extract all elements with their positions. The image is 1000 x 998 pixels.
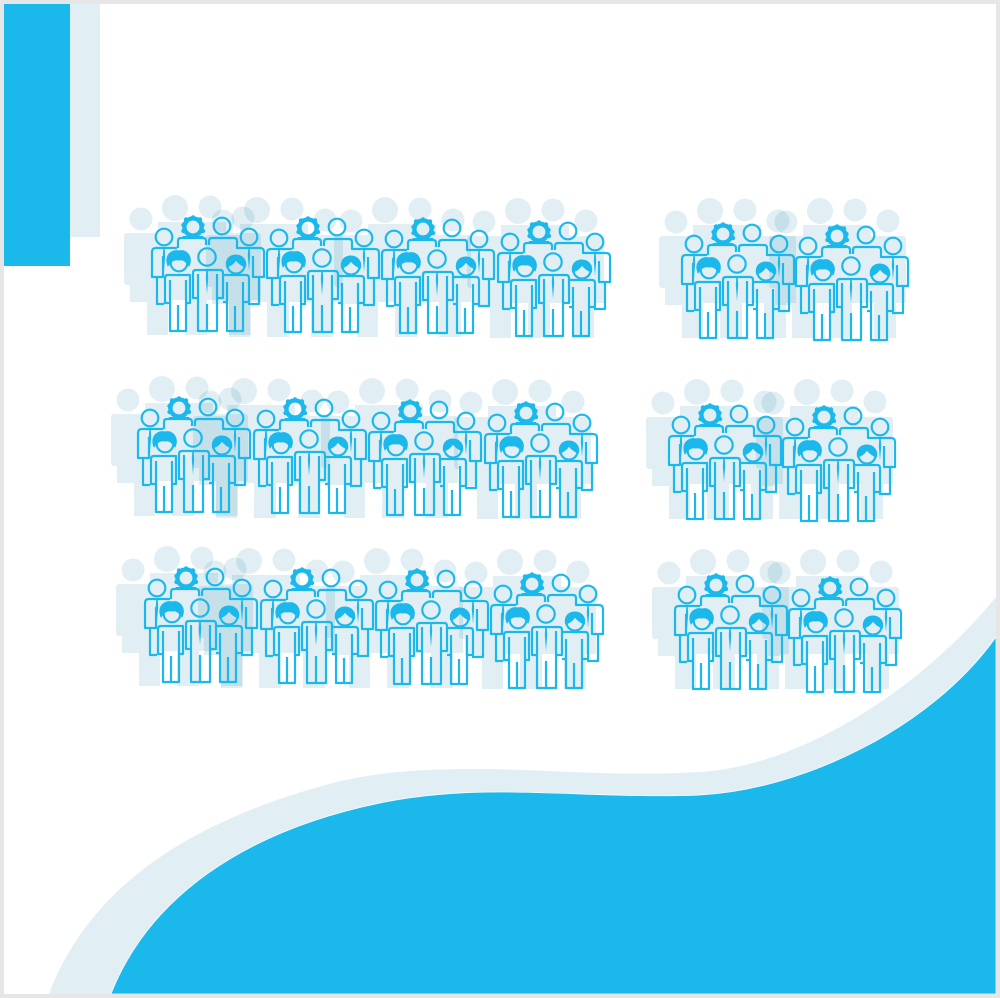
people group row 2 no 2 <box>254 397 366 513</box>
people group row 1 no 5 <box>682 222 794 338</box>
crowd outlines <box>138 215 908 692</box>
people group row 3 no 5 <box>675 573 787 689</box>
people group row 3 no 2 <box>261 567 373 683</box>
pale wave <box>49 597 996 994</box>
people group row 2 no 1 <box>138 396 250 512</box>
people group row 2 no 6 <box>783 405 895 521</box>
people group row 3 no 3 <box>376 568 488 684</box>
crowd shadows <box>111 195 906 689</box>
people group row 3 no 4 <box>491 572 603 688</box>
people group row 1 no 3 <box>382 217 494 333</box>
pale corner bar <box>70 4 100 237</box>
blue wave <box>111 637 996 994</box>
people group row 1 no 6 <box>796 224 908 340</box>
people group row 1 no 4 <box>498 220 610 336</box>
people group row 2 no 5 <box>669 403 781 519</box>
people group row 2 no 3 <box>369 399 481 515</box>
people group row 1 no 2 <box>267 216 379 332</box>
blue corner bar <box>4 4 70 266</box>
people group row 1 no 1 <box>152 215 264 331</box>
people group row 3 no 6 <box>789 576 901 692</box>
people group row 2 no 4 <box>485 401 597 517</box>
people group row 3 no 1 <box>145 566 257 682</box>
